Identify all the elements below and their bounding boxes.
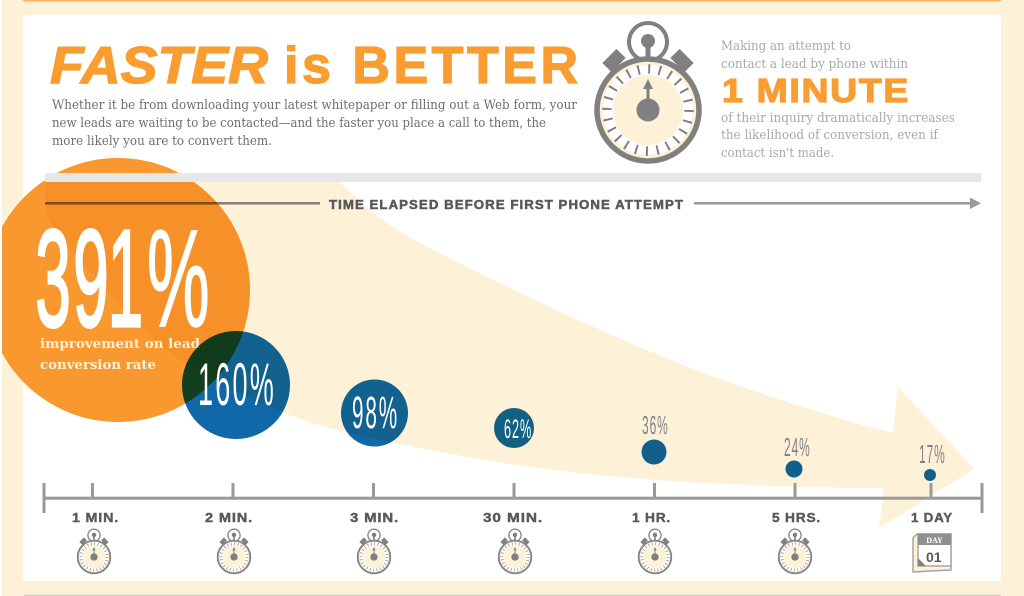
title: is BETTER <box>284 37 578 95</box>
intro paragraph: Whether it be from downloading your latest whitepaper or filling out a Web form, your <box>52 97 578 112</box>
icon: calendar <box>913 534 951 572</box>
icon: large stopwatch <box>597 23 699 161</box>
bubble: 36% <box>642 412 669 464</box>
stat: 391%: improvement on lead <box>40 337 200 352</box>
stat: 391%: conversion rate <box>40 358 156 373</box>
icon: stopwatch 2 min <box>218 529 250 573</box>
stat: 391%: 391 <box>35 201 143 356</box>
bubble: 160% <box>182 331 290 439</box>
label: 1 min: 1 MIN. <box>72 511 119 525</box>
title <box>50 37 578 95</box>
icon: calendar: 01 <box>926 549 942 565</box>
label: 1 hr: 1 HR. <box>632 511 671 525</box>
icon: stopwatch 1 min <box>78 529 110 573</box>
stat: 391%: % <box>147 203 210 356</box>
icon: stopwatch 3 min <box>358 529 390 573</box>
intro paragraph: new leads are waiting to be contacted—and the faster you place a call to them, the <box>52 115 546 130</box>
intro paragraph: more likely you are to convert them. <box>52 133 272 148</box>
stat: 391% <box>35 201 210 373</box>
callout: 1 minute: the likelihood of conversion, even if <box>721 127 939 142</box>
callout: 1 minute: Making an attempt to <box>721 38 851 53</box>
title: FASTER <box>50 37 268 95</box>
icon: stopwatch 1 hr <box>639 529 671 573</box>
label: 30 min: 30 MIN. <box>483 511 543 525</box>
callout: 1 minute: 1 MINUTE <box>722 72 910 109</box>
label: 3 min: 3 MIN. <box>350 511 399 525</box>
bubble: 24% <box>784 434 811 478</box>
orange circle: 391% <box>0 158 250 422</box>
intro paragraph <box>52 97 578 148</box>
cream time arrow <box>45 182 974 528</box>
bubble: 98%: 98% <box>352 388 399 438</box>
bubble: 62% <box>494 408 534 448</box>
grey divider bar <box>45 173 981 182</box>
axis heading: time elapsed <box>45 198 981 212</box>
axis heading: time elapsed: TIME ELAPSED BEFORE FIRST PHONE ATTEMPT <box>329 198 684 212</box>
icon: stopwatch 5 hrs <box>779 529 811 573</box>
bubble: 62%: 62% <box>504 415 532 444</box>
icon: stopwatch 30 min <box>499 529 531 573</box>
label: 1 day: 1 DAY <box>911 511 953 525</box>
callout: 1 minute: contact isn't made. <box>721 145 834 160</box>
bubble: 24%: 24% <box>784 434 811 462</box>
bubble: 98% <box>341 380 408 446</box>
bubble: 36%: 36% <box>642 412 669 440</box>
callout: 1 minute: contact a lead by phone within <box>721 56 908 71</box>
bubble: 160%: 160% <box>198 351 276 418</box>
bubble: 17%: 17% <box>919 441 946 469</box>
icon: calendar: DAY <box>926 536 943 545</box>
label: 2 min: 2 MIN. <box>205 511 253 525</box>
timeline axis <box>42 483 984 513</box>
callout: 1 minute: of their inquiry dramatically increases <box>721 110 955 125</box>
callout: 1 minute <box>721 38 955 160</box>
label: 5 hrs: 5 HRS. <box>772 511 821 525</box>
